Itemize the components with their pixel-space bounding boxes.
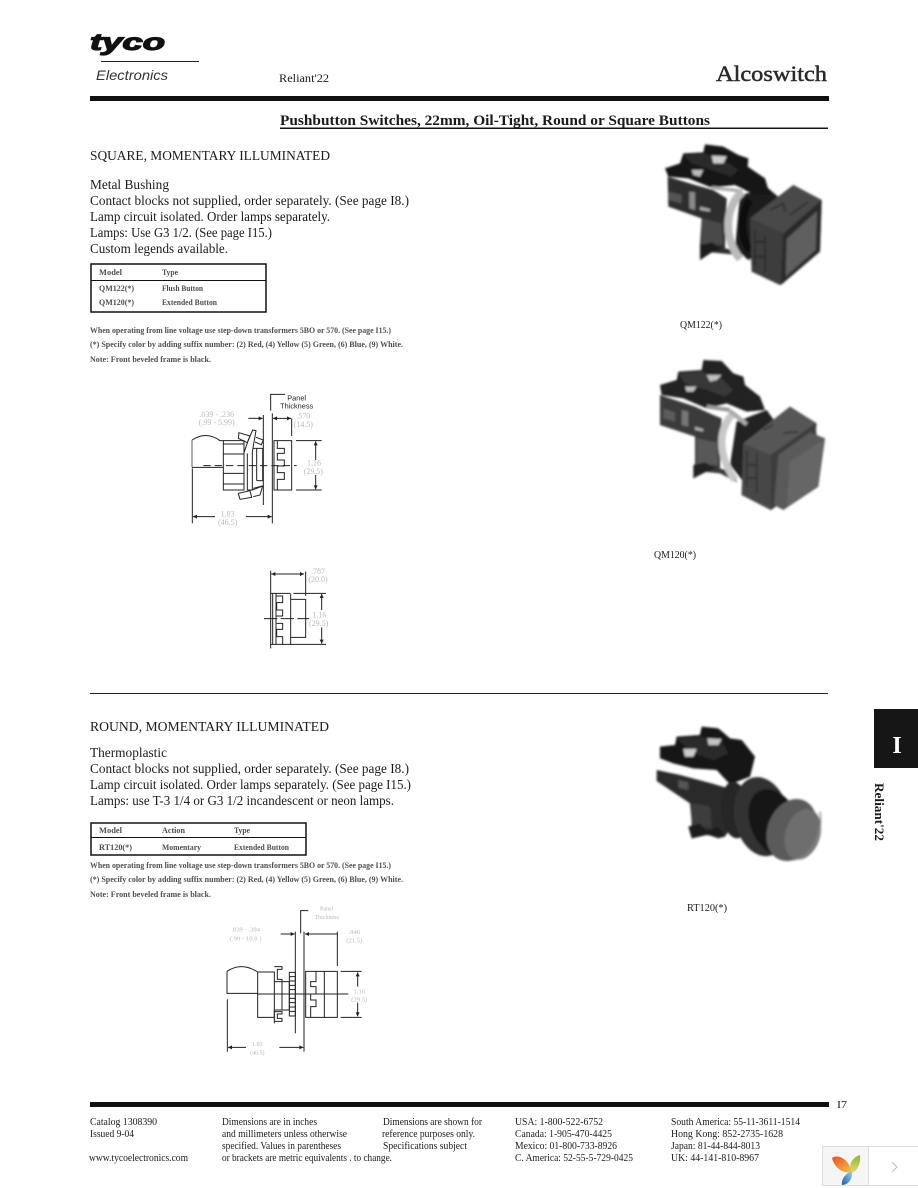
footer: americas contacts: Canada: 1-905-470-4425	[515, 1129, 612, 1140]
caption: RT120: RT120(*)	[687, 903, 727, 914]
dimension drawing: RT120 side view: 1.83	[252, 1042, 263, 1048]
footer: dimensions note: and millimeters unless otherwise	[222, 1129, 347, 1140]
table: round models: Type	[234, 825, 250, 835]
notes: round	[90, 860, 403, 899]
table: square models	[91, 264, 266, 312]
text block: square description: Lamps: Use G3 1/2. (See page I15.)	[90, 225, 272, 240]
footer: americas contacts	[515, 1117, 633, 1164]
footer: international contacts: Hong Kong: 852-2735-1628	[671, 1129, 783, 1140]
dimension drawing: QM122 side view: (29.5)	[304, 467, 323, 476]
footer: americas contacts: Mexico: 01-800-733-8926	[515, 1141, 617, 1152]
dimension drawing: RT120 side view: (29.5)	[351, 997, 367, 1004]
dimension drawing: RT120 side view: Thickness	[315, 915, 339, 921]
dimension drawing: QM122 side view: (14.5)	[294, 420, 313, 429]
divider	[90, 693, 828, 694]
text block: square description: Contact blocks not supplied, order separately. (See page I8.)	[90, 193, 409, 208]
footer: dimensions note: Dimensions are in inches	[222, 1117, 317, 1128]
logo: tyco Electronics	[90, 29, 199, 83]
header series label: Reliant'22	[279, 71, 329, 85]
footer: international contacts	[671, 1117, 801, 1164]
text block: round description: Thermoplastic	[90, 745, 167, 760]
text block: square description: Metal Bushing	[90, 177, 169, 192]
viewer widget: logo and next arrow	[822, 1146, 918, 1186]
table: square models: QM120(*)	[99, 297, 134, 307]
table: round models: Action	[162, 825, 185, 835]
footer: reference note: reference purposes only.	[382, 1129, 475, 1140]
table: square models: Model	[99, 267, 123, 277]
logo: tyco Electronics: Electronics	[96, 67, 168, 83]
table: round models	[91, 823, 306, 855]
dimension drawing: QM122 side view: Panel	[287, 394, 306, 403]
table: square models: Extended Button	[162, 297, 217, 307]
text block: square description: Custom legends available.	[90, 241, 228, 256]
table: round models: Momentary	[162, 842, 202, 852]
text block: round description: Lamp circuit isolated. Order lamps separately. (See page I15.)	[90, 777, 411, 792]
dimension drawing: RT120 side view: (46.5)	[250, 1049, 265, 1056]
dimension drawing: RT120 side view: (.99 - 10.0 )	[230, 935, 261, 942]
notes: square: Note: Front beveled frame is black.	[90, 354, 211, 364]
footer: international contacts: UK: 44-141-810-8967	[671, 1153, 759, 1164]
page number: I7	[837, 1099, 848, 1111]
dimension drawing: QM120 rear view: (29.5)	[309, 619, 329, 628]
footer: americas contacts: C. America: 52-55-5-729-0425	[515, 1153, 633, 1164]
dimension drawing: RT120 side view: 1.16	[354, 988, 366, 995]
footer: dimensions note	[222, 1117, 392, 1164]
side tab: section I	[874, 709, 918, 768]
footer: dimensions note: or brackets are metric equivalents . to change.	[222, 1153, 392, 1164]
dimension drawing: QM122 side view: 1.16	[307, 458, 321, 467]
dimension drawing: QM122 side view: (46.5)	[218, 518, 238, 527]
footer: reference note	[382, 1117, 482, 1152]
footer: international contacts: Japan: 81-44-844-8013	[671, 1141, 760, 1152]
dimension drawing: QM122 side view: Thickness	[280, 402, 313, 411]
title: Pushbutton Switches, 22mm, Oil-Tight, Round or Square Buttons	[280, 113, 710, 129]
dimension drawing: RT120 side view: (21.5)	[346, 937, 362, 944]
photo: RT120 switch	[657, 727, 827, 869]
dimension drawing: RT120 side view	[227, 907, 367, 1056]
caption: QM122: QM122(*)	[680, 320, 722, 331]
footer: reference note: Specifications subject	[383, 1141, 467, 1152]
table: round models: RT120(*)	[99, 842, 132, 852]
dimension drawing: RT120 side view: .039 - .394	[231, 927, 261, 934]
text block: round description	[90, 745, 411, 808]
header rule	[90, 96, 829, 101]
notes: square: (*) Specify color by adding suffix number: (2) Red, (4) Yellow (5) Green, (6) Blue, (9) White.	[90, 339, 403, 349]
side tab: section I: I	[892, 733, 902, 759]
footer: catalog: Catalog 1308390	[90, 1117, 157, 1128]
notes: round: Note: Front beveled frame is black.	[90, 889, 211, 899]
dimension drawing: QM120 rear view: (20.0)	[308, 575, 328, 584]
dimension drawing: RT120 side view: .846	[349, 929, 361, 936]
caption: QM120: QM120(*)	[654, 550, 696, 561]
footer: americas contacts: USA: 1-800-522-6752	[515, 1117, 603, 1128]
text block: round description: Lamps: use T-3 1/4 or G3 1/2 incandescent or neon lamps.	[90, 793, 394, 808]
table: square models: QM122(*)	[99, 283, 134, 293]
dimension drawing: QM122 side view: 1.83	[221, 510, 235, 519]
side label: Reliant'22: Reliant'22	[872, 783, 886, 841]
text block: square description	[90, 177, 409, 256]
notes: round: (*) Specify color by adding suffix number: (2) Red, (4) Yellow (5) Green, (6) Blue, (9) White.	[90, 874, 403, 884]
text block: square description: Lamp circuit isolated. Order lamps separately.	[90, 209, 330, 224]
table: round models: Model	[99, 825, 123, 835]
table: square models: Type	[162, 267, 178, 277]
section heading: round: ROUND, MOMENTARY ILLUMINATED	[90, 720, 329, 735]
footer: catalog: www.tycoelectronics.com	[89, 1153, 188, 1164]
notes: round: When operating from line voltage use step-down transformers 5BO or 570. (See page I15.)	[90, 860, 391, 870]
dimension drawing: QM120 rear view: .787	[311, 567, 325, 576]
photo: QM122 switch	[665, 144, 822, 285]
footer rule	[90, 1102, 829, 1107]
section heading: square: SQUARE, MOMENTARY ILLUMINATED	[90, 149, 330, 164]
text block: round description: Contact blocks not supplied, order separately. (See page I8.)	[90, 761, 409, 776]
footer: international contacts: South America: 55-11-3611-1514	[671, 1117, 801, 1128]
footer: catalog: Issued 9-04	[90, 1129, 135, 1140]
footer: dimensions note: specified. Values in parentheses	[222, 1141, 341, 1152]
footer: reference note: Dimensions are shown for	[383, 1117, 482, 1128]
dimension drawing: QM120 rear view	[264, 567, 329, 648]
table: round models: Extended Button	[234, 842, 289, 852]
brand: Alcoswitch: Alcoswitch	[716, 61, 827, 86]
notes: square: When operating from line voltage use step-down transformers 5BO or 570. (See page I15.)	[90, 325, 391, 335]
dimension drawing: QM120 rear view: 1.16	[312, 610, 326, 619]
notes: square	[90, 325, 403, 364]
dimension drawing: QM122 side view: (.99 - 5.99)	[199, 418, 235, 427]
photo: QM120 switch	[660, 360, 825, 510]
dimension drawing: QM122 side view: .039 - .236	[199, 410, 234, 419]
dimension drawing: QM122 side view	[192, 394, 323, 527]
dimension drawing: QM122 side view: .570	[296, 412, 310, 421]
logo: tyco Electronics: tyco	[90, 29, 165, 55]
footer: catalog	[89, 1117, 188, 1164]
table: square models: Flush Button	[162, 283, 203, 293]
dimension drawing: RT120 side view: Panel	[320, 907, 334, 913]
